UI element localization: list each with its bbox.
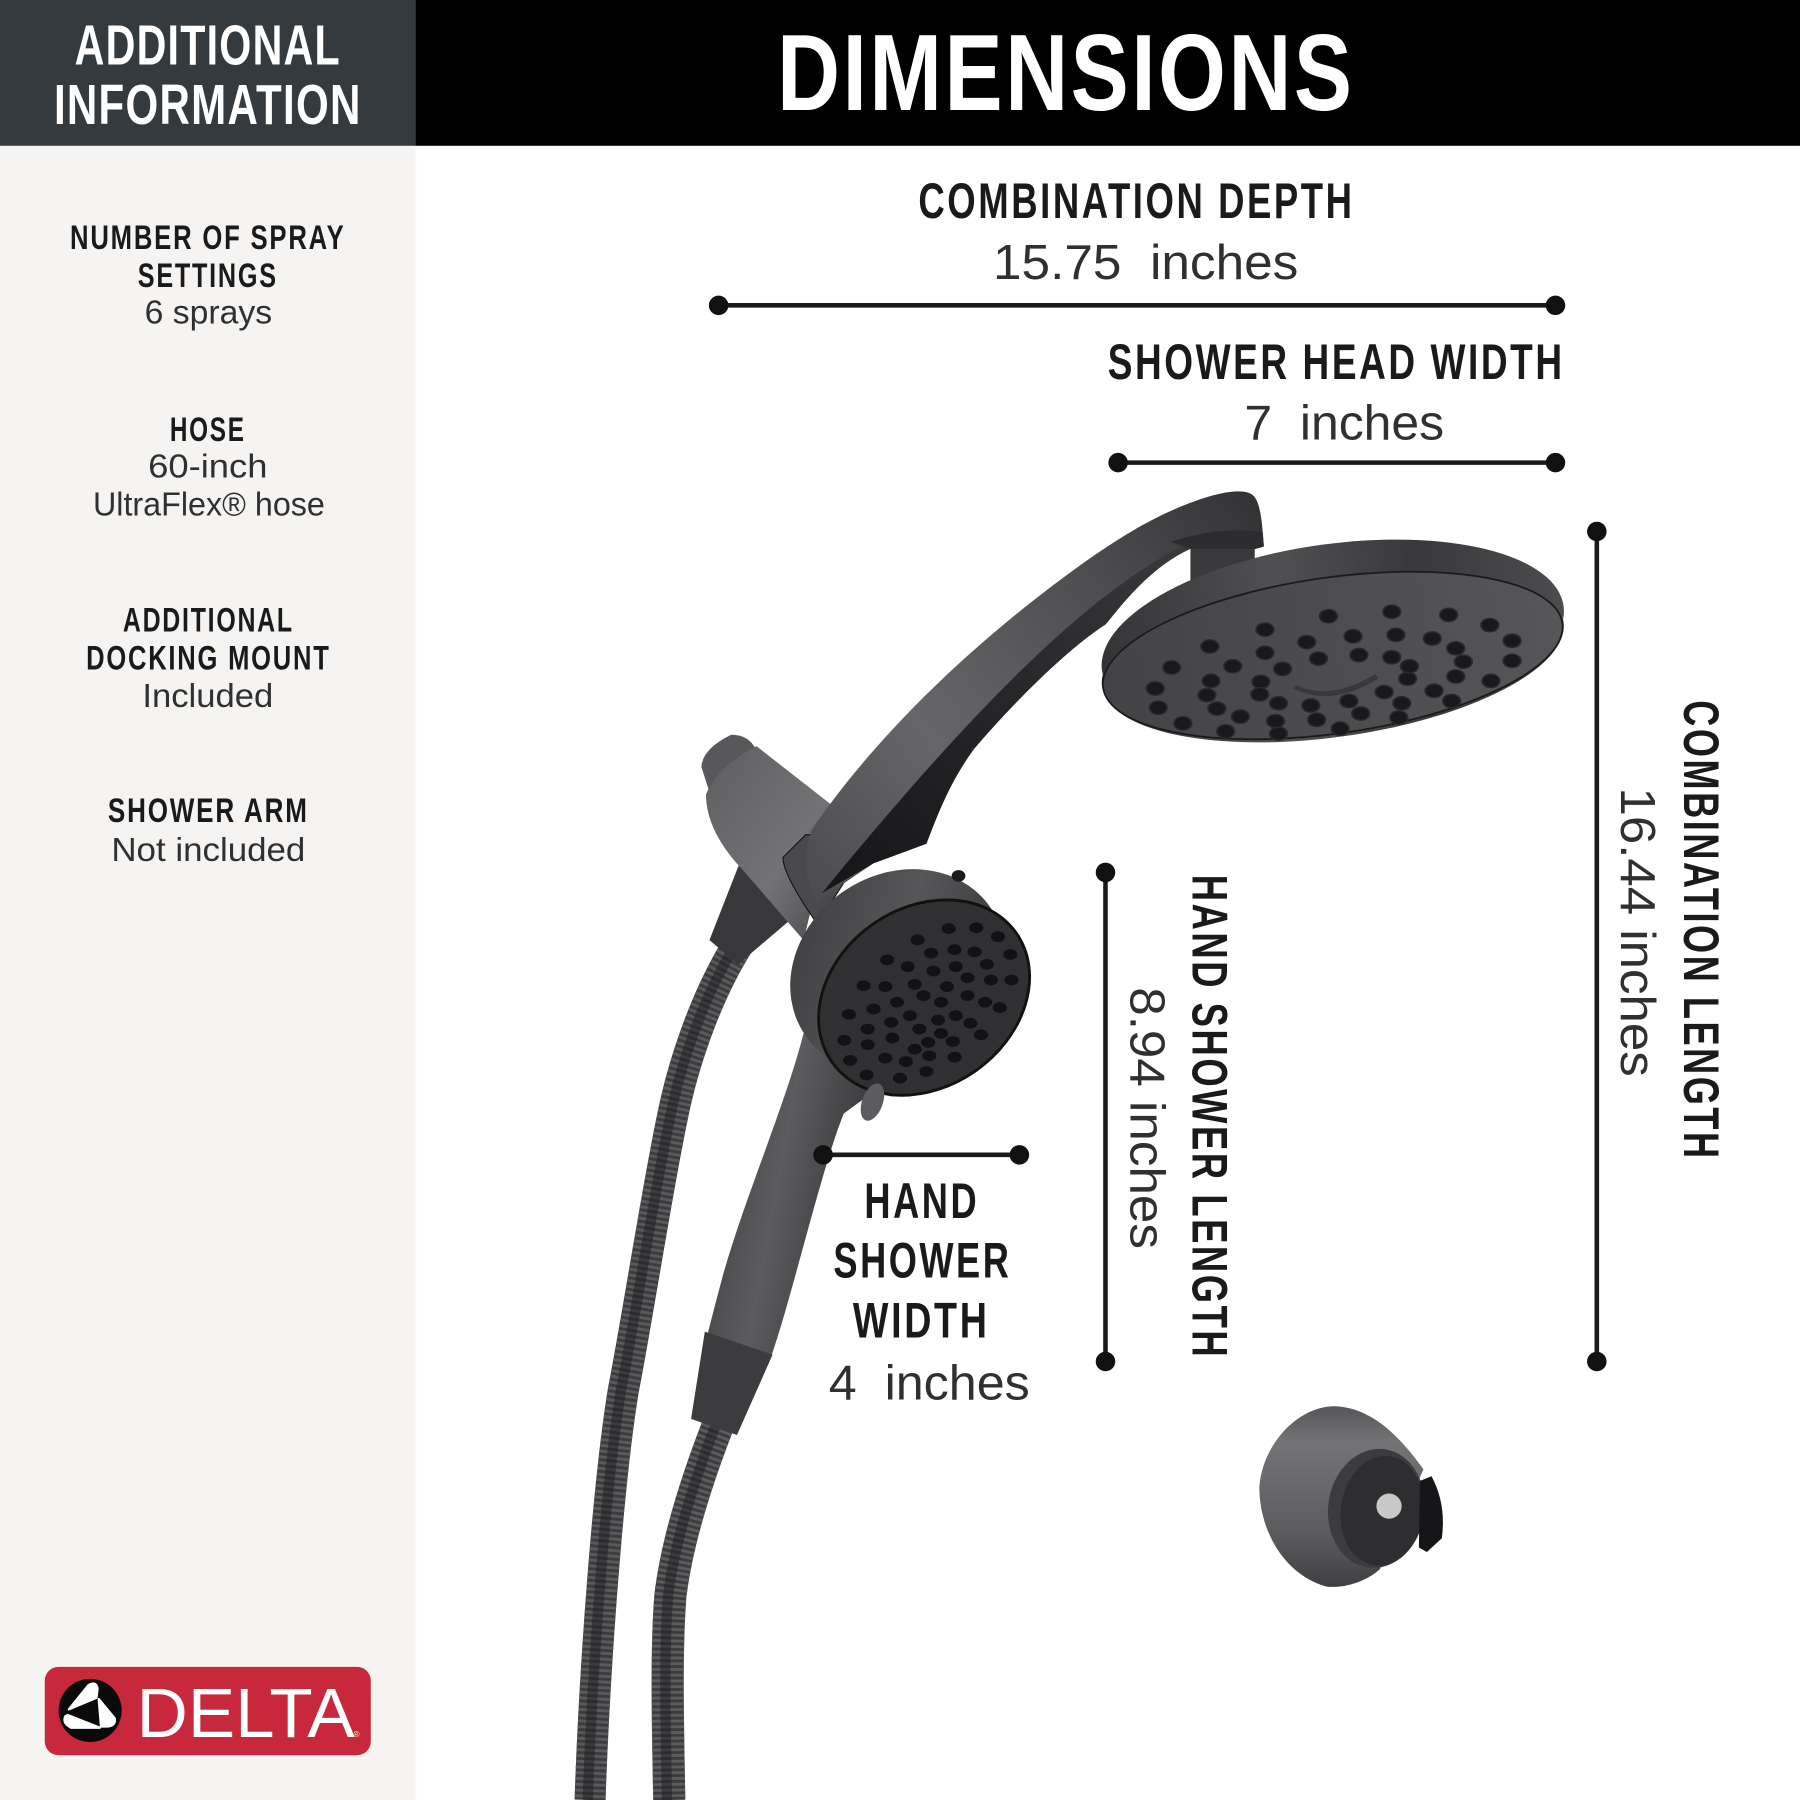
spec: additional docking mount: DOCKING MOUNT — [86, 639, 331, 677]
shower head face — [1092, 546, 1573, 765]
dimension: hand shower width: 4 inches — [829, 1355, 1030, 1410]
spec: additional docking mount: ADDITIONAL — [123, 601, 294, 639]
spec: hose — [93, 411, 325, 523]
shower arm — [783, 491, 1264, 924]
header: additional information — [0, 0, 416, 146]
neck between arm and shower head — [1190, 549, 1255, 583]
spec: hose: 60-inch — [148, 449, 267, 486]
hand shower nub — [952, 870, 965, 882]
dimension: hand shower width — [813, 1145, 1030, 1410]
dimension: combination length: COMBINATION LENGTH — [1673, 700, 1730, 1161]
header: additional information: ADDITIONAL — [75, 13, 341, 76]
logo: delta: ® — [354, 1730, 360, 1739]
hand shower nozzles — [837, 922, 1019, 1084]
mount: diverter and hose collar — [701, 735, 836, 964]
hand shower head — [750, 828, 1068, 1135]
dimension: shower head width: SHOWER HEAD WIDTH — [1108, 333, 1565, 390]
header: additional information: INFORMATION — [54, 73, 362, 136]
logo: delta: DELTA — [137, 1674, 355, 1752]
dimension: hand shower length: 8.94 inches — [1120, 987, 1175, 1249]
dimension: hand shower length: HAND SHOWER LENGTH — [1182, 875, 1239, 1359]
docking mount — [1259, 1406, 1443, 1587]
dimension: hand shower length — [1096, 863, 1239, 1371]
logo: delta — [45, 1667, 371, 1755]
hand shower handle — [691, 1033, 907, 1435]
spec: hose: HOSE — [170, 411, 246, 449]
hand shower face — [781, 860, 1068, 1135]
spec: shower arm: Not included — [111, 832, 305, 869]
panel: additional information sidebar — [0, 146, 416, 1800]
dimension: combination depth: COMBINATION DEPTH — [918, 172, 1355, 229]
spec: number of spray settings — [70, 219, 346, 332]
shower head nozzles — [1146, 605, 1521, 740]
title: dimensions — [416, 0, 1800, 146]
spec: shower arm: SHOWER ARM — [108, 792, 309, 830]
dimension: hand shower width: WIDTH — [853, 1291, 990, 1348]
dimension: shower head width: 7 inches — [1244, 396, 1444, 451]
title: dimensions: DIMENSIONS — [777, 12, 1355, 134]
spec: number of spray settings: 6 sprays — [145, 295, 272, 332]
dimension: shower head width — [1108, 333, 1565, 472]
hose: main hose to wall mount — [588, 932, 746, 1800]
shower head — [1089, 513, 1577, 769]
dimension: combination length: 16.44 inches — [1610, 788, 1665, 1077]
hand shower trigger — [856, 1080, 889, 1124]
dimension: combination length — [1587, 522, 1730, 1371]
hand shower body — [750, 828, 1045, 1115]
dimension: hand shower width: HAND — [864, 1172, 979, 1229]
spec: number of spray settings: NUMBER OF SPRAY — [70, 219, 346, 257]
hose: hand shower hose — [665, 1412, 723, 1800]
spec: additional docking mount: Included — [142, 678, 273, 715]
dimension: combination depth — [709, 172, 1565, 315]
dimension: combination depth: 15.75 inches — [993, 235, 1298, 290]
dimension: hand shower width: SHOWER — [833, 1232, 1011, 1289]
shower head body — [1089, 513, 1577, 769]
spec: number of spray settings: SETTINGS — [138, 257, 278, 295]
spec: additional docking mount — [86, 601, 331, 715]
spec: shower arm — [108, 792, 309, 869]
spec: hose: UltraFlex® hose — [93, 486, 325, 523]
